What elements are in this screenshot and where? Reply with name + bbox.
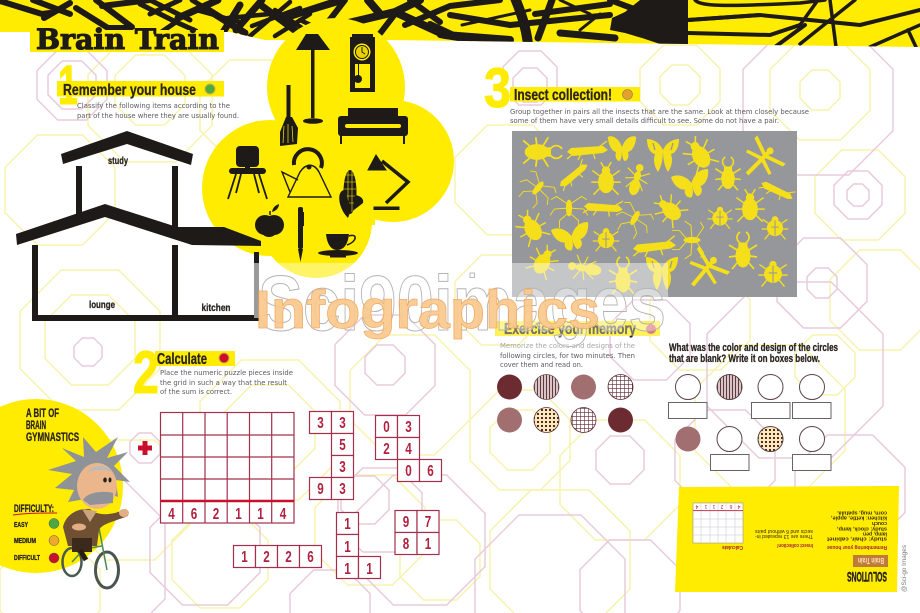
icon: chair (228, 146, 267, 199)
watermark: Infographics (255, 280, 600, 340)
sum grid: 2 (213, 506, 219, 523)
puzzle piece D (336, 512, 380, 578)
puzzle piece E: 9 (403, 514, 409, 531)
panel: solutions (upside down): SOLUTIONS (847, 569, 887, 585)
answers: remember your house: corn, mug, spatula. (836, 510, 887, 516)
head (77, 463, 117, 509)
sum grid: 1 (235, 506, 242, 523)
puzzle piece B: 4 (405, 441, 412, 458)
section 2 heading (133, 339, 235, 406)
answers: calculate mini grid: 2 (720, 503, 723, 509)
title: Brain Train (36, 23, 219, 56)
panel: solutions (upside down) (675, 486, 899, 592)
section 4 instructions: following circles, for two minutes. Then (500, 351, 635, 360)
section 4 heading: Exercise your memory (504, 321, 636, 338)
answers: remember your house: kitchen: kettle, apple, (830, 514, 887, 520)
puzzle piece B: 0 (383, 419, 390, 436)
answers: calculate mini grid: 1 (712, 503, 715, 509)
section 2 heading: Calculate (157, 351, 207, 368)
section 2 instructions: of the sum is correct. (160, 387, 232, 396)
illustration: Einstein on a bicycle (48, 437, 130, 588)
puzzle piece D: 1 (366, 561, 373, 578)
icon: broom (280, 85, 298, 146)
brain train tag (853, 555, 888, 567)
section 4 instructions: Memorize the colors and designs of the (500, 341, 635, 350)
icon: sofa (338, 108, 408, 144)
section 3 instructions (510, 107, 809, 125)
heading: a bit of brain gymnastics (26, 406, 79, 444)
puzzle piece A (310, 412, 354, 500)
answers: insect collection: Insect collection! (777, 542, 813, 548)
answers: insect collection: sects and 6 without pairs (755, 528, 813, 534)
section 2 instructions: the grid in such a way that the result (160, 378, 287, 387)
puzzle piece B: 6 (427, 463, 434, 480)
answers: remember your house: study: chair, cabinet (827, 536, 887, 542)
puzzle piece B: 0 (405, 463, 412, 480)
memory question: What was the color and design of the circles (669, 342, 838, 354)
number 3: 3 (484, 56, 511, 119)
yellow blob with household items (202, 18, 454, 280)
memory circles to memorize (497, 374, 633, 432)
room labels: study (108, 155, 128, 167)
insects (510, 131, 796, 298)
answers: calculate mini grid: 1 (704, 503, 707, 509)
section 3 heading (484, 56, 640, 119)
difficulty legend: DIFFICULT (14, 555, 41, 562)
top banner (0, 0, 920, 47)
puzzle piece D: 1 (344, 539, 351, 556)
puzzle piece C: 6 (307, 549, 314, 566)
icon: floor lamp (296, 34, 330, 124)
answers: calculate mini grid: 4 (695, 503, 698, 509)
sum grid: 6 (191, 506, 197, 523)
puzzle piece E: 1 (425, 536, 431, 553)
memory question (669, 342, 838, 365)
sum grid: 1 (257, 506, 264, 523)
puzzle piece D: 1 (344, 516, 351, 533)
heading: a bit of brain gymnastics: GYMNASTICS (26, 430, 79, 444)
watermark: Sci90images (258, 259, 666, 347)
sum grid: 4 (168, 506, 175, 523)
puzzle piece C: 1 (241, 549, 248, 566)
puzzle piece B: 3 (405, 419, 412, 436)
answers: insect collection: There are 13 repeated in- (755, 533, 813, 539)
section 4 instructions: cover them and read on. (500, 360, 583, 369)
sum grid (160, 412, 294, 523)
puzzle piece A: 3 (339, 415, 346, 432)
bicycle (62, 520, 118, 588)
image credit: @Sci-go Images (902, 545, 908, 592)
puzzle piece A: 5 (339, 437, 346, 454)
section 1 heading (57, 53, 224, 116)
puzzle piece B: 2 (383, 441, 390, 458)
answers: calculate mini grid: Calculate (722, 544, 743, 550)
room labels: lounge (89, 299, 115, 311)
section 3 instructions: Group together in pairs all the insects that are the same. Look at them closely because (510, 107, 809, 116)
section 4 instructions (500, 341, 635, 369)
puzzle piece C (234, 546, 322, 568)
panel: difficulty circle (0, 399, 123, 573)
icon: apple (255, 204, 284, 237)
puzzle piece C: 2 (285, 549, 292, 566)
icon: teacup (318, 234, 358, 258)
icon: corn (339, 170, 363, 218)
puzzle piece D: 1 (344, 561, 351, 578)
answers: calculate mini grid: 6 (729, 503, 732, 509)
puzzle piece E: 8 (403, 536, 409, 553)
puzzle piece A: 9 (317, 481, 324, 498)
section 1 instructions (77, 101, 239, 120)
answers: insect collection (755, 528, 813, 548)
answers: remember your house: Remembering your house (827, 544, 887, 550)
answers: remember your house: study: clock, lamp, (836, 526, 887, 532)
answers: remember your house: lamp, pen (863, 530, 887, 536)
difficulty legend: EASY (14, 522, 28, 529)
puzzle piece E (395, 510, 439, 554)
section 1 instructions: Classify the following items according to the (77, 101, 230, 110)
icon: pendulum clock (350, 34, 375, 92)
section 2 instructions: Place the numeric puzzle pieces inside (160, 368, 293, 377)
room labels (89, 155, 230, 314)
section 3 instructions: some of them have very small details difficult to see. Some do not have a pair. (510, 116, 779, 125)
difficulty legend: MEDIUM (14, 538, 36, 545)
puzzle piece A: 3 (317, 415, 324, 432)
puzzle piece C: 2 (263, 549, 270, 566)
panel: insect collection (510, 131, 797, 298)
number 1: 1 (58, 53, 78, 116)
answers: calculate mini grid (693, 503, 743, 550)
plus sign (138, 441, 152, 455)
room labels: kitchen (202, 302, 230, 314)
memory answer circles and boxes (668, 374, 831, 470)
difficulty legend: DIFFICULTY: (14, 503, 54, 515)
body (63, 509, 129, 560)
puzzle piece A: 3 (339, 481, 346, 498)
heading: a bit of brain gymnastics: BRAIN (26, 418, 46, 432)
sum grid: 4 (280, 506, 286, 523)
icon: desk lamp (368, 155, 408, 210)
brain train tag: Brain Train (858, 556, 884, 565)
puzzle piece B (376, 416, 442, 482)
icon: pen (298, 207, 304, 262)
section 2 instructions (160, 368, 293, 396)
section 1 instructions: part of the house where they are usually found. (77, 111, 239, 120)
answers: remember your house (827, 510, 887, 550)
puzzle piece A: 3 (339, 459, 346, 476)
hair (48, 437, 130, 502)
answers: remember your house: couch (872, 520, 887, 526)
heading: a bit of brain gymnastics: A BIT OF (26, 406, 59, 420)
puzzle piece E: 7 (425, 514, 431, 531)
icon: kettle (282, 149, 331, 197)
house outline (16, 131, 261, 321)
section 1 heading: Remember your house (63, 82, 196, 99)
difficulty legend (13, 503, 59, 563)
number 2: 2 (133, 339, 159, 406)
section 3 heading: Insect collection! (514, 87, 612, 104)
answers: calculate mini grid: 4 (737, 503, 740, 509)
memory question: that are blank? Write it on boxes below. (669, 353, 820, 365)
